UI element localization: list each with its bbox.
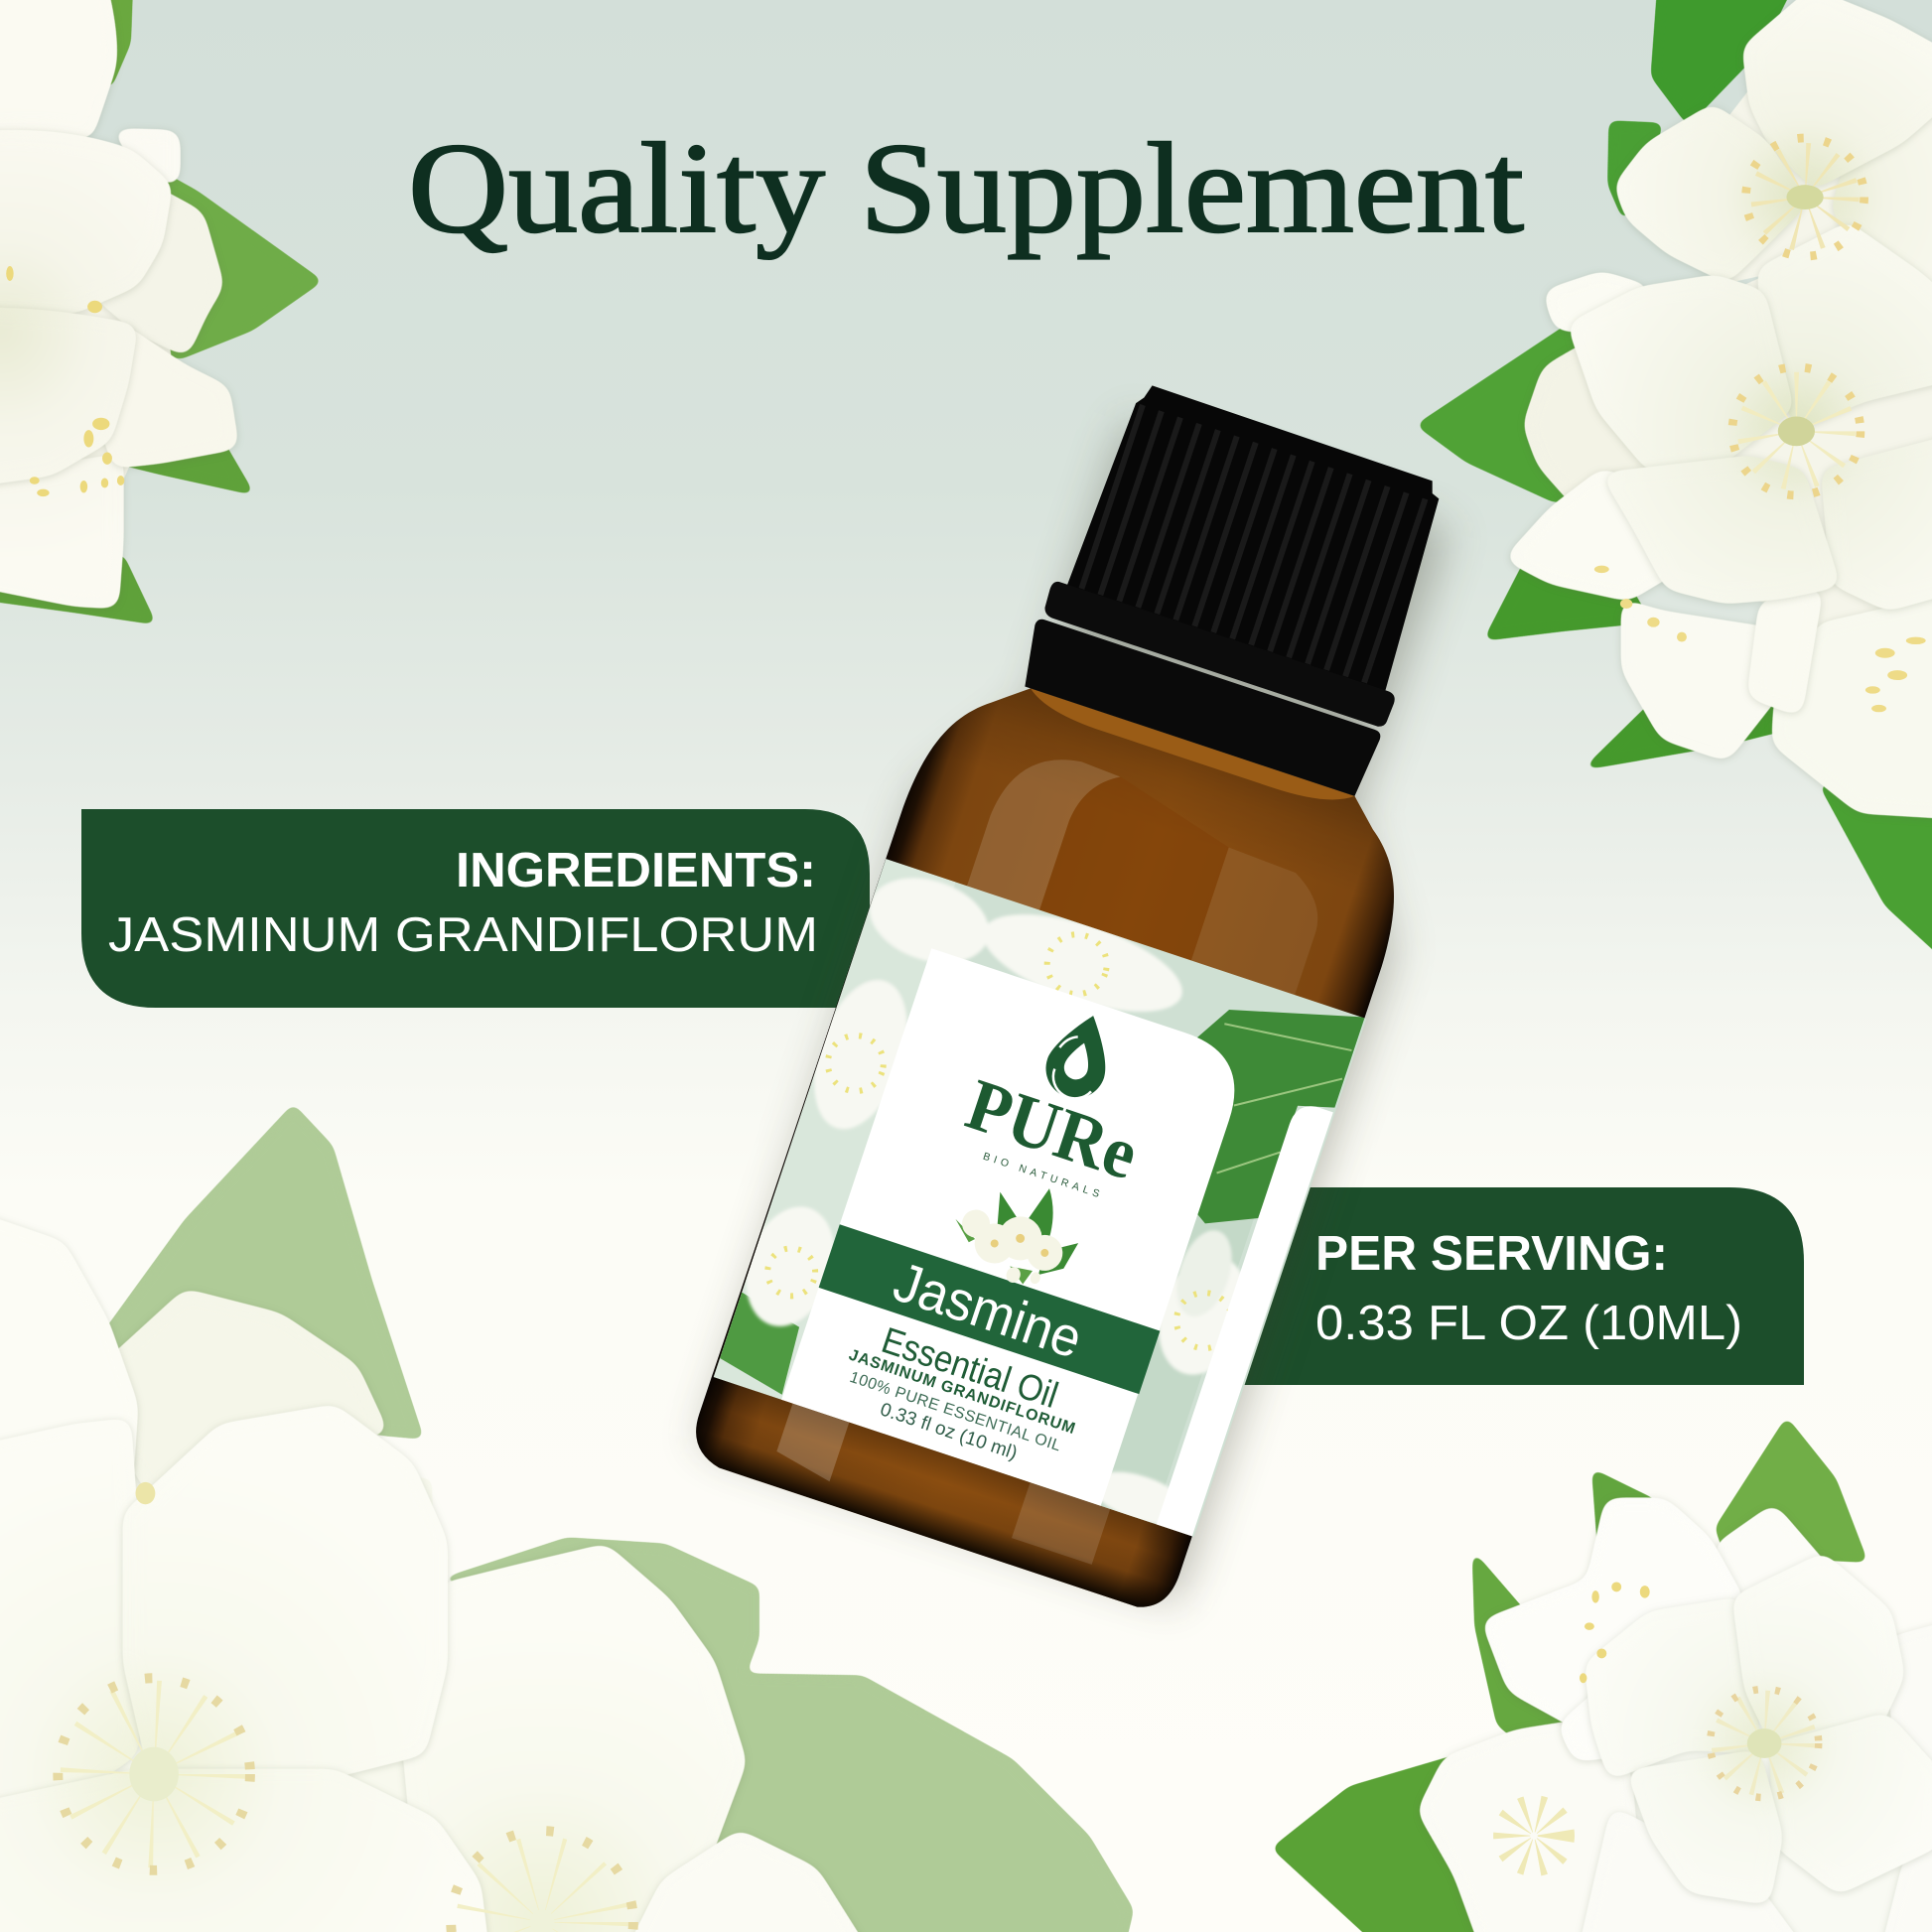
- small jasmine illustration: [942, 1164, 1092, 1299]
- serving heading: PER SERVING:: [1315, 1227, 1668, 1281]
- label green band: [819, 1224, 1160, 1394]
- label volume: 0.33 fl oz (10 ml): [878, 1399, 1020, 1464]
- label subtitle: Essential Oil: [877, 1319, 1063, 1416]
- label botanical name: JASMINUM GRANDIFLORUM: [847, 1346, 1077, 1438]
- panel: per serving: [1142, 1187, 1804, 1385]
- bottle: [685, 385, 1463, 1617]
- flower cluster: bottom right: [1272, 1417, 1932, 1932]
- bottle glass: [685, 661, 1430, 1616]
- logo drop icon: [1038, 1007, 1122, 1106]
- flower cluster: top right: [1416, 0, 1932, 973]
- ingredients heading: INGREDIENTS:: [456, 844, 816, 897]
- ingredients value: JASMINUM GRANDIFLORUM: [108, 908, 818, 962]
- black cap: [1016, 374, 1465, 798]
- panel: ingredients: [81, 809, 870, 1008]
- bottle label: [708, 857, 1367, 1542]
- logo tagline: BIO NATURALS: [982, 1151, 1101, 1200]
- logo wordmark: PURe: [957, 1063, 1148, 1195]
- label product name: Jasmine: [887, 1250, 1090, 1370]
- label purity: 100% PURE ESSENTIAL OIL: [848, 1369, 1063, 1454]
- flower cluster: top left: [0, 0, 323, 624]
- serving value: 0.33 FL OZ (10ML): [1315, 1297, 1742, 1350]
- flower cluster: bottom left (faded): [0, 1104, 1134, 1932]
- title: Quality Supplement: [408, 117, 1524, 260]
